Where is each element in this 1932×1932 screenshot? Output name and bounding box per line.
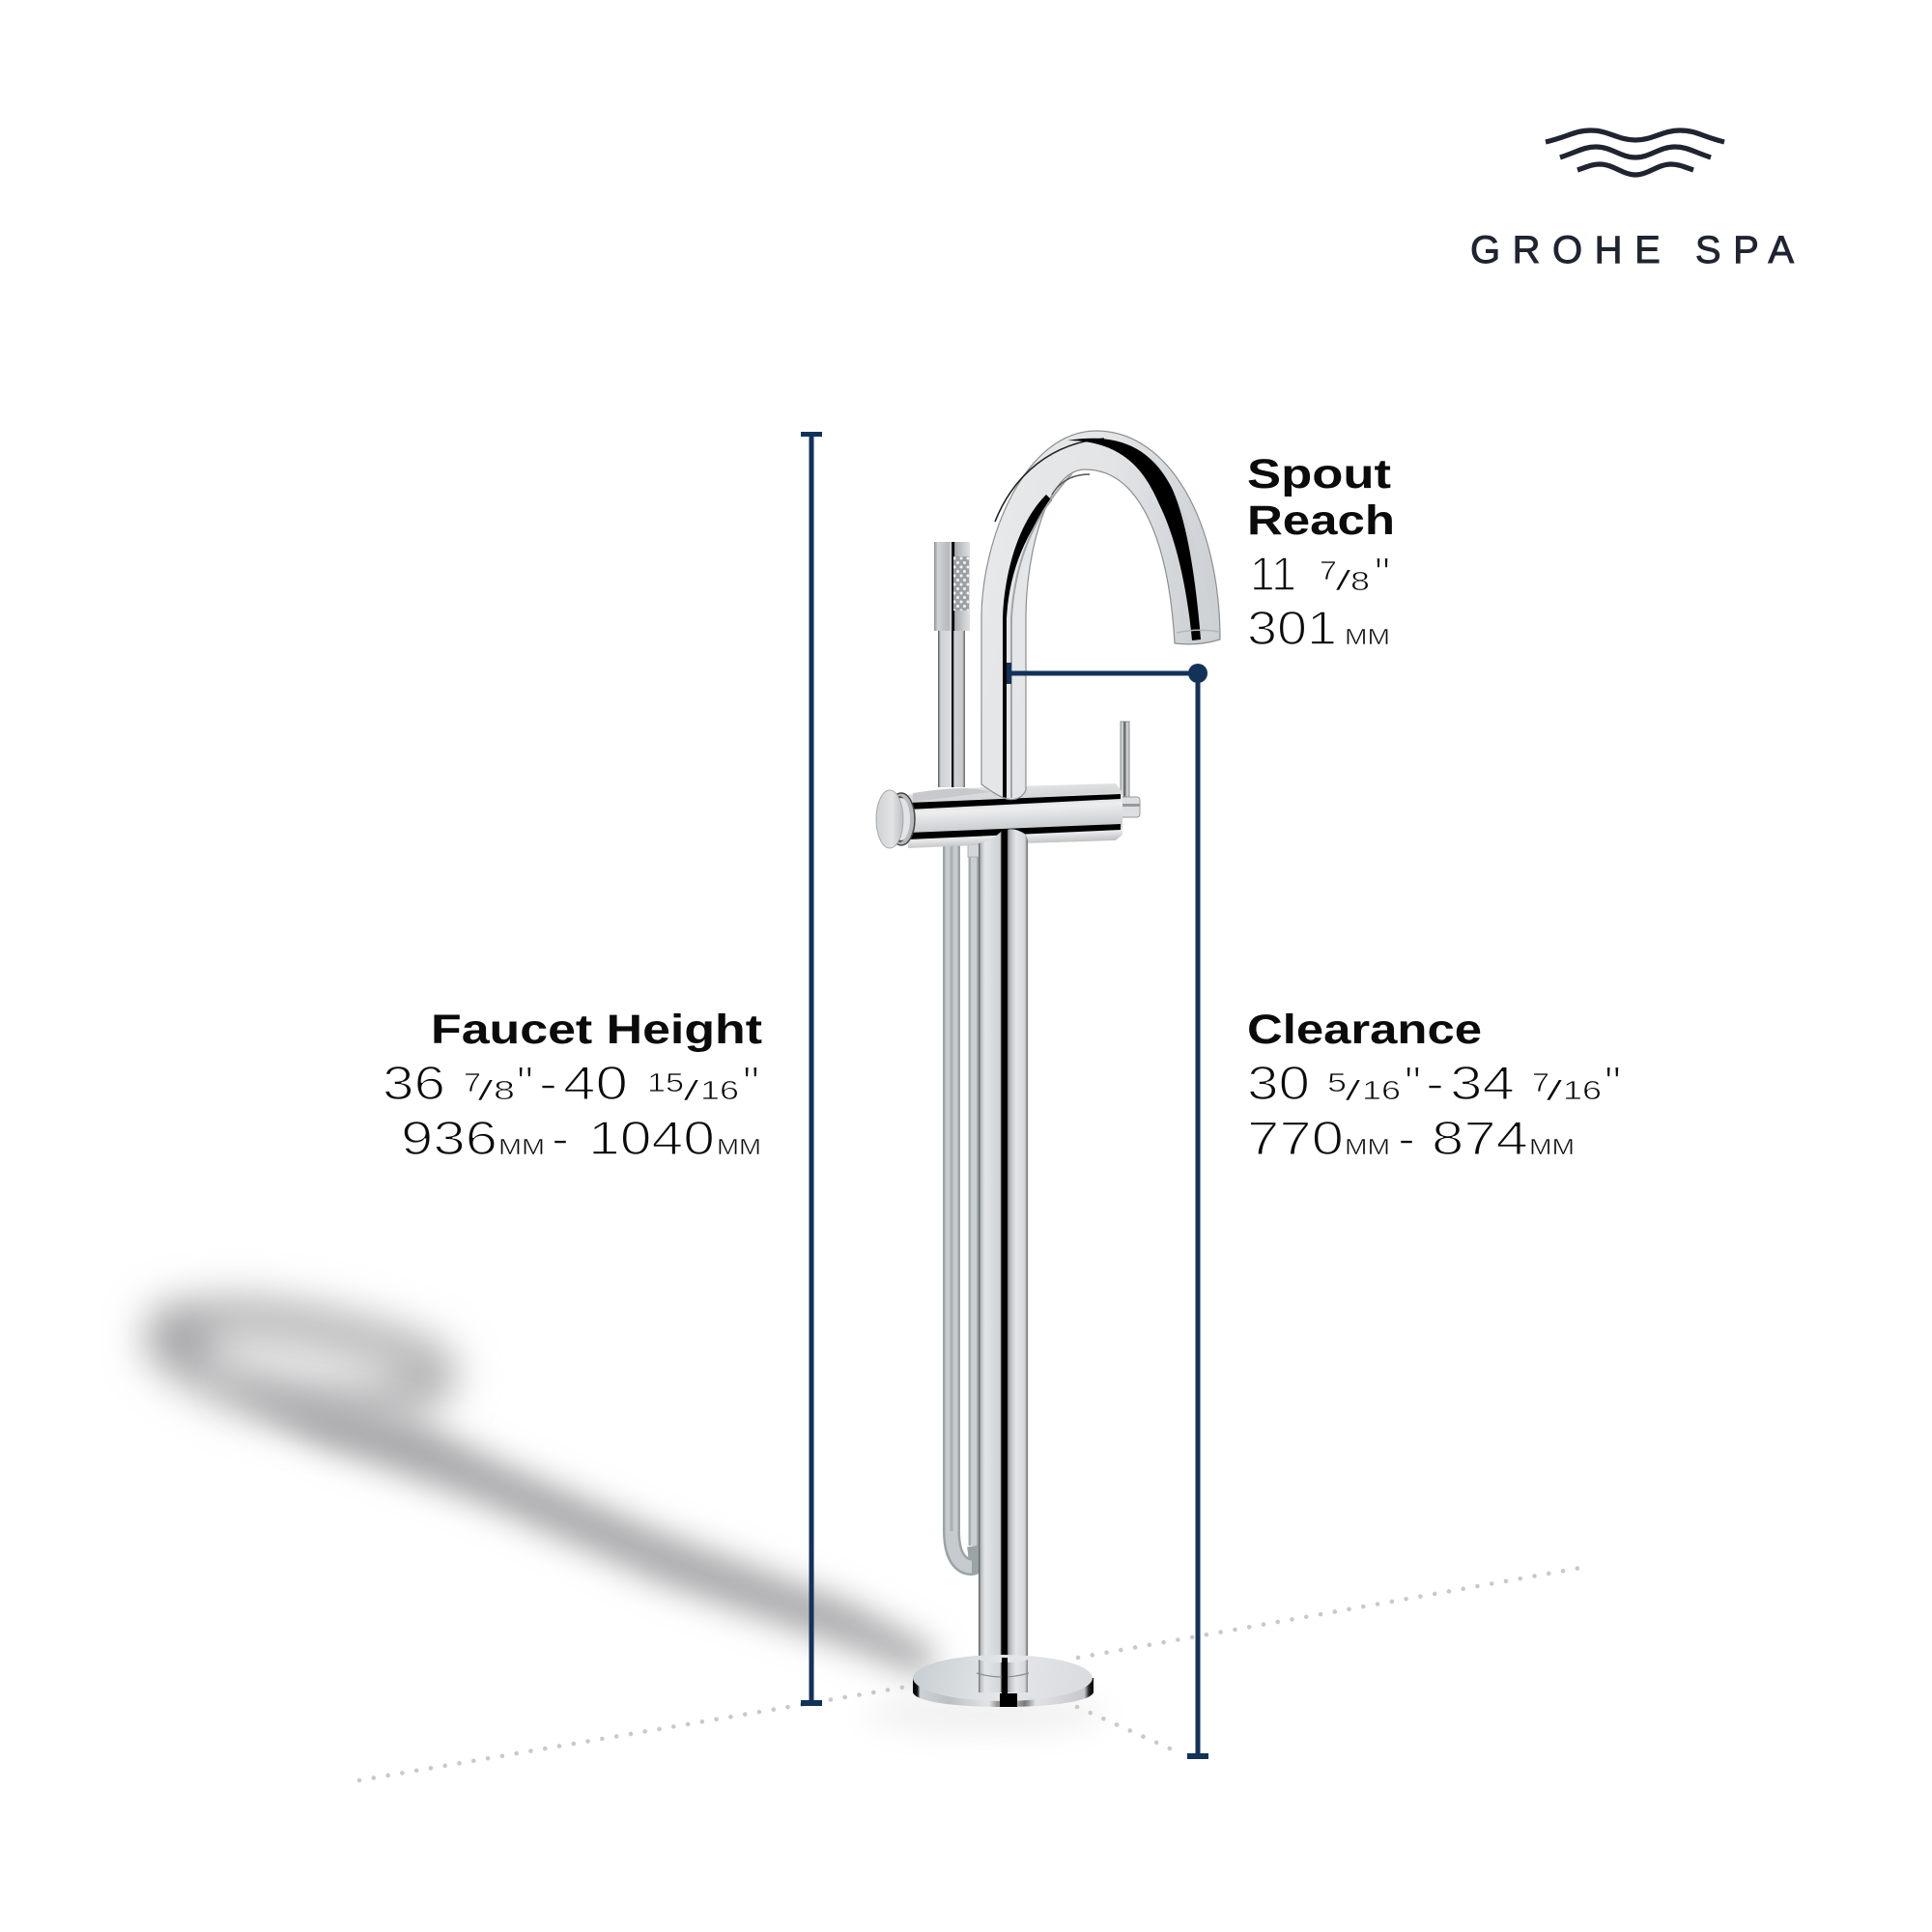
label: faucet height: 8 <box>494 1075 515 1105</box>
label: faucet height: 15 <box>647 1067 684 1097</box>
hand shower <box>934 542 970 787</box>
label: clearance: 7 <box>1532 1067 1549 1097</box>
faucet <box>876 431 1220 1707</box>
logo: Grohe Spa <box>1470 130 1794 271</box>
label: clearance: 874 <box>1432 1113 1528 1165</box>
label: faucet height: 36 <box>383 1058 445 1110</box>
icon: water waves <box>1546 130 1724 175</box>
label: clearance: Clearance <box>1247 1007 1482 1053</box>
label: faucet height: - <box>539 1058 557 1110</box>
label: clearance <box>1247 1007 1621 1165</box>
label: clearance: / <box>1345 1075 1362 1107</box>
lower column <box>979 829 1028 1692</box>
label: faucet height: Faucet Height <box>431 1007 762 1053</box>
label: faucet height: " <box>517 1058 533 1110</box>
label: faucet height: 16 <box>700 1075 739 1105</box>
label: spout reach: Spout <box>1247 451 1391 497</box>
label: spout reach: MM <box>1345 624 1390 649</box>
label: clearance: 34 <box>1450 1058 1515 1110</box>
label: clearance: MM <box>1345 1134 1390 1159</box>
label: faucet height: MM <box>498 1134 545 1159</box>
label: spout reach: / <box>1335 565 1352 597</box>
label: faucet height: MM <box>717 1134 761 1159</box>
label: clearance: 30 <box>1247 1058 1310 1110</box>
cast shadow of the faucet <box>145 1301 1106 1736</box>
label: faucet height: / <box>477 1075 495 1107</box>
label: faucet height: 1040 <box>588 1113 715 1165</box>
label: clearance: " <box>1605 1058 1621 1110</box>
label: faucet height: - <box>552 1113 569 1165</box>
label: faucet height: 7 <box>464 1067 481 1097</box>
base plate <box>913 1655 1094 1707</box>
label: clearance: - <box>1398 1113 1415 1165</box>
dimension line: faucet height <box>801 432 822 1706</box>
label: spout reach <box>1247 451 1395 655</box>
label: faucet height: 936 <box>401 1113 497 1165</box>
label: faucet height: 40 <box>563 1058 628 1110</box>
dotted floor lines <box>359 1568 1580 1780</box>
mixer body <box>876 783 1140 848</box>
label: faucet height <box>383 1007 762 1165</box>
label: spout reach: 8 <box>1350 566 1370 596</box>
label: clearance: 16 <box>1362 1075 1401 1105</box>
label: spout reach: Reach <box>1247 497 1395 544</box>
label: spout reach: " <box>1375 549 1390 601</box>
label: clearance: / <box>1546 1075 1564 1107</box>
wordmark: GROHE SPA <box>1470 229 1794 271</box>
label: clearance: 16 <box>1563 1075 1602 1105</box>
label: faucet height: / <box>683 1075 700 1107</box>
label: clearance: " <box>1405 1058 1421 1110</box>
label: clearance: 770 <box>1247 1113 1344 1165</box>
label: faucet height: " <box>743 1058 759 1110</box>
label: clearance: 5 <box>1327 1067 1347 1097</box>
label: clearance: MM <box>1529 1134 1575 1159</box>
label: spout reach: 11 <box>1250 549 1296 601</box>
label: spout reach: 7 <box>1320 555 1337 585</box>
spout and upper column <box>981 431 1220 800</box>
hose <box>952 842 980 1567</box>
lever <box>1121 722 1129 801</box>
dimension lines: spout reach and clearance <box>1007 663 1208 1759</box>
label: spout reach: 301 <box>1247 603 1337 655</box>
label: clearance: - <box>1426 1058 1444 1110</box>
